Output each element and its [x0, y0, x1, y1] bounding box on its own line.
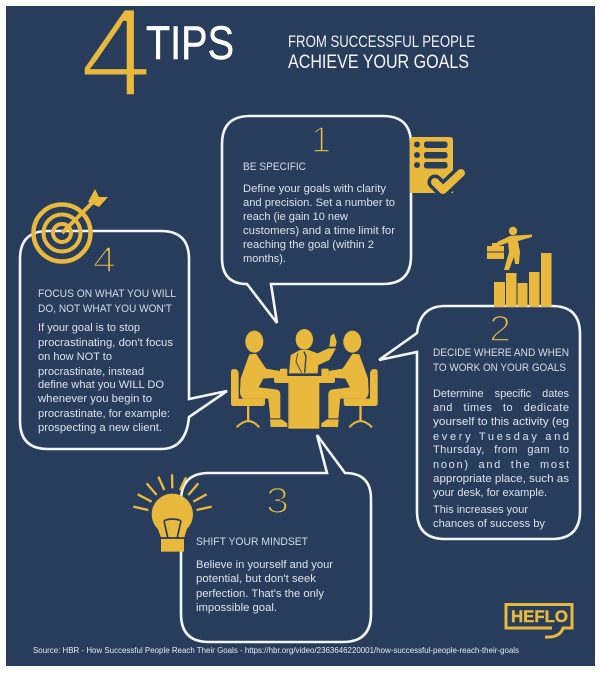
heading 4: FOCUS ON WHAT YOU WILL: [38, 288, 176, 300]
body text 2: [433, 388, 570, 530]
body text 2: chances of success by: [433, 518, 546, 530]
body text 1: customers) and a time limit for: [243, 225, 395, 237]
panel: tip 2 decide where and when: [379, 306, 580, 539]
word TIPS: TIPS: [146, 16, 234, 69]
icon: checklist: [410, 137, 461, 193]
body text 1: [243, 183, 395, 265]
heading 4: [38, 288, 176, 315]
bars: [494, 253, 552, 307]
heading 3: SHIFT YOUR MINDSET: [196, 536, 309, 548]
body text 4: define what you WILL DO: [38, 379, 164, 391]
body text 2: This increases your: [433, 504, 528, 516]
table: [274, 369, 335, 429]
body text 3: perfection. That's the only: [196, 588, 325, 600]
number 1: 1: [311, 119, 331, 160]
body text 4: procrastinate, for example:: [38, 408, 170, 420]
body text 3: impossible goal.: [196, 602, 277, 614]
heading 2: [433, 347, 569, 374]
body text 4: procrastinating, don't focus: [38, 337, 174, 349]
bulb: [152, 494, 193, 535]
number 3: 3: [266, 480, 289, 521]
speech bubble 1: [222, 116, 411, 323]
body text 4: If your goal is to stop: [38, 322, 140, 334]
panel: tip 4 focus on what you will do: [20, 231, 227, 449]
title: [80, 0, 475, 123]
heading 4: DO, NOT WHAT YOU WON'T: [38, 303, 172, 315]
body text 2: Determine specific dates: [433, 388, 570, 400]
number 2: 2: [489, 308, 511, 349]
body text 4: on how NOT to: [38, 351, 112, 363]
body text 1: Define your goals with clarity: [243, 183, 386, 195]
number 4: 4: [93, 239, 116, 280]
body text 3: potential, but don't seek: [196, 573, 317, 585]
logo: HEFLO: HEFLO: [511, 607, 568, 626]
center person: [289, 329, 337, 373]
right person: [321, 331, 378, 427]
body text 4: whenever you begin to: [37, 393, 152, 405]
body text 4: prospecting a new client.: [38, 422, 162, 434]
icon: target with arrow: [34, 189, 108, 262]
body text 3: [196, 559, 333, 614]
body text 2: appropriate place, such as: [433, 473, 570, 485]
subtitle line one: FROM SUCCESSFUL PEOPLE: [288, 33, 475, 51]
body text 1: and precision. Set a number to: [243, 197, 395, 209]
icon: light bulb: [133, 474, 212, 552]
body text 1: months).: [243, 253, 286, 265]
panel: tip 3 shift your mindset: [181, 435, 371, 642]
body text 2: every Tuesday and: [433, 431, 569, 443]
heading 1: BE SPECIFIC: [243, 161, 306, 173]
icon: businessman climbing bar chart: [487, 227, 552, 307]
body text 1: reaching the goal (within 2: [243, 239, 374, 251]
body text 2: and times to dedicate: [433, 402, 569, 414]
businessman: [487, 227, 532, 270]
body text 3: Believe in yourself and your: [196, 559, 333, 571]
body text 4: procrastinate, instead: [38, 366, 144, 378]
body text 2: yourself to this activity (eg: [433, 416, 569, 428]
speech bubble 4: [20, 231, 227, 449]
speech bubble 3: [181, 435, 371, 642]
left person: [231, 331, 287, 427]
body text 4: [37, 322, 174, 434]
body text 2: your desk, for example.: [433, 487, 547, 499]
rays: [133, 474, 212, 510]
subtitle line two: ACHIEVE YOUR GOALS: [288, 52, 469, 73]
panel: tip 1 be specific: [222, 116, 411, 323]
body text 1: reach (ie gain 10 new: [243, 211, 348, 223]
body text 2: noon) and the most: [433, 459, 569, 471]
icon: meeting of three people at a table: [231, 329, 378, 429]
heading 2: TO WORK ON YOUR GOALS: [433, 362, 566, 374]
speech bubble 2: [379, 306, 580, 539]
logo: HEFLO: [506, 604, 572, 637]
source line: Source: HBR - How Successful People Reach Their Goals - https://hbr.org/video/2363646220001/how-successful-people-reach-their-goals: [33, 645, 519, 655]
body text 2: Thursday, from gam to: [433, 444, 569, 456]
heading 2: DECIDE WHERE AND WHEN: [433, 347, 569, 359]
